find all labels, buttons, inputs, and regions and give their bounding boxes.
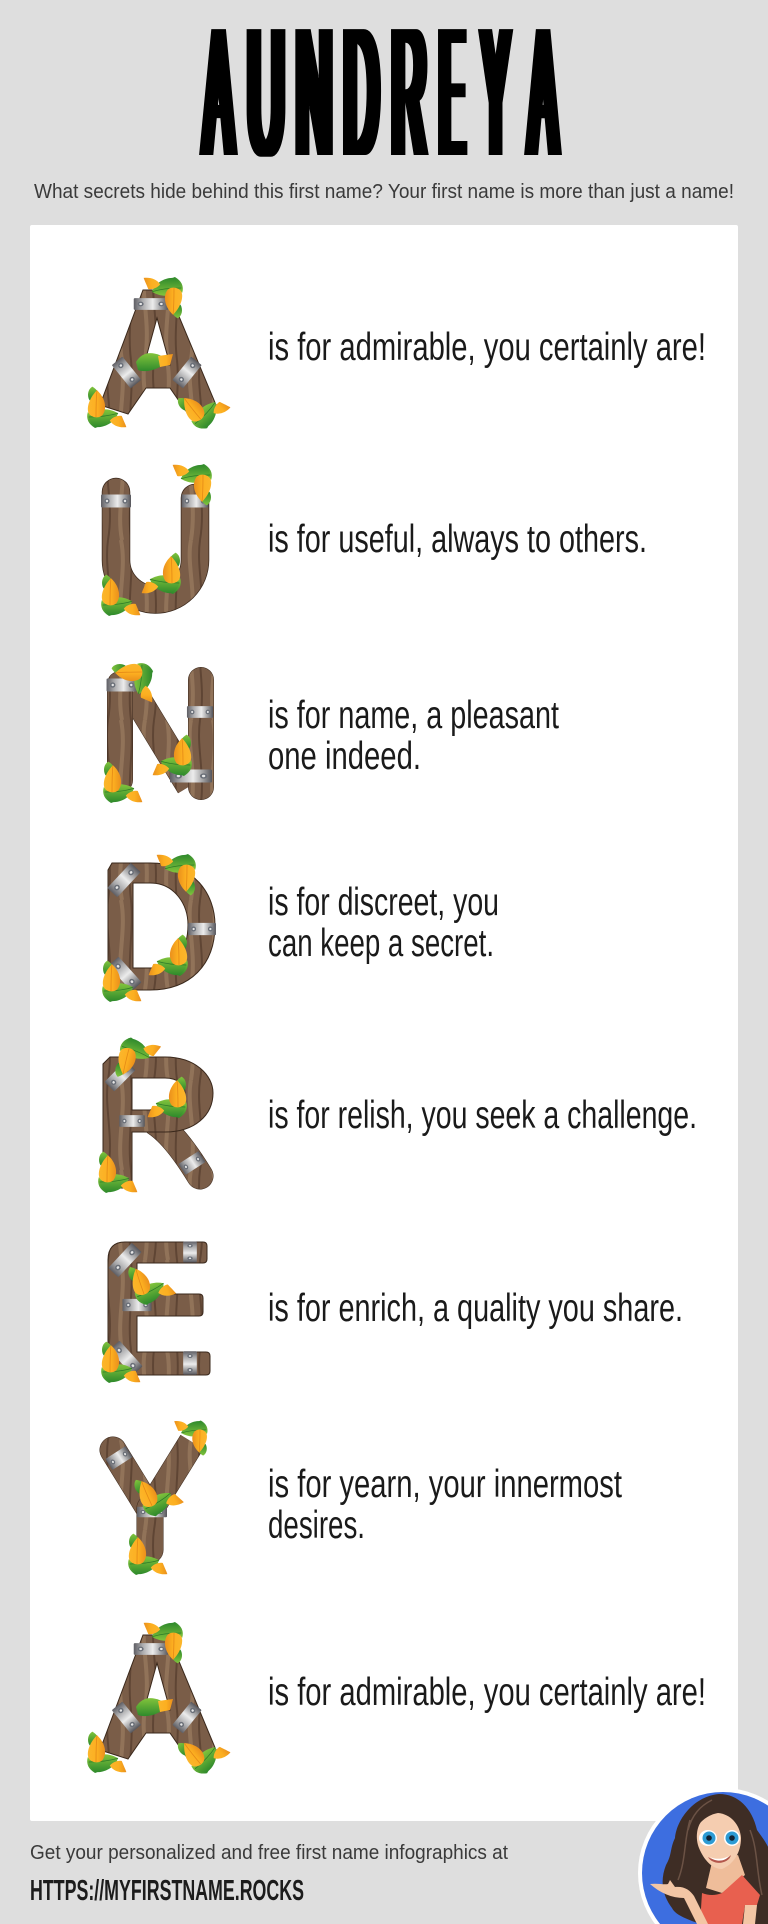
icon: wooden letter E (101, 1242, 210, 1383)
text: D: can keep a secret. (268, 922, 494, 965)
subtitle: What secrets hide behind this first name? Your first name is more than just a name! (34, 180, 734, 203)
text: Y: is for yearn, your innermost (268, 1463, 622, 1506)
text: Y (268, 1463, 622, 1547)
text: U: is for useful, always to others. (268, 518, 647, 561)
text: N: one indeed. (268, 735, 421, 778)
icon: wooden letter A (repeat) (87, 1622, 231, 1778)
icon: wooden letter Y (105, 1420, 208, 1575)
icon: wooden letter R (98, 1035, 213, 1193)
title (204, 0, 557, 195)
icon: wooden letter D (102, 854, 216, 1002)
text: N (268, 694, 559, 778)
icon: wooden letter A (87, 277, 231, 433)
text: N: is for name, a pleasant (268, 694, 559, 737)
text: Y: desires. (268, 1504, 365, 1547)
text: D: is for discreet, you (268, 881, 499, 924)
icon: wooden letter U (101, 464, 212, 616)
footer call to action: Get your personalized and free first name infographics at (30, 1842, 508, 1864)
icon: avatar of woman (638, 1788, 768, 1924)
panel: white letters card (30, 225, 738, 1821)
footer url: HTTPS://MYFIRSTNAME.ROCKS (30, 1875, 304, 1907)
icon: wooden letter N (103, 663, 213, 803)
text: D (268, 881, 499, 965)
